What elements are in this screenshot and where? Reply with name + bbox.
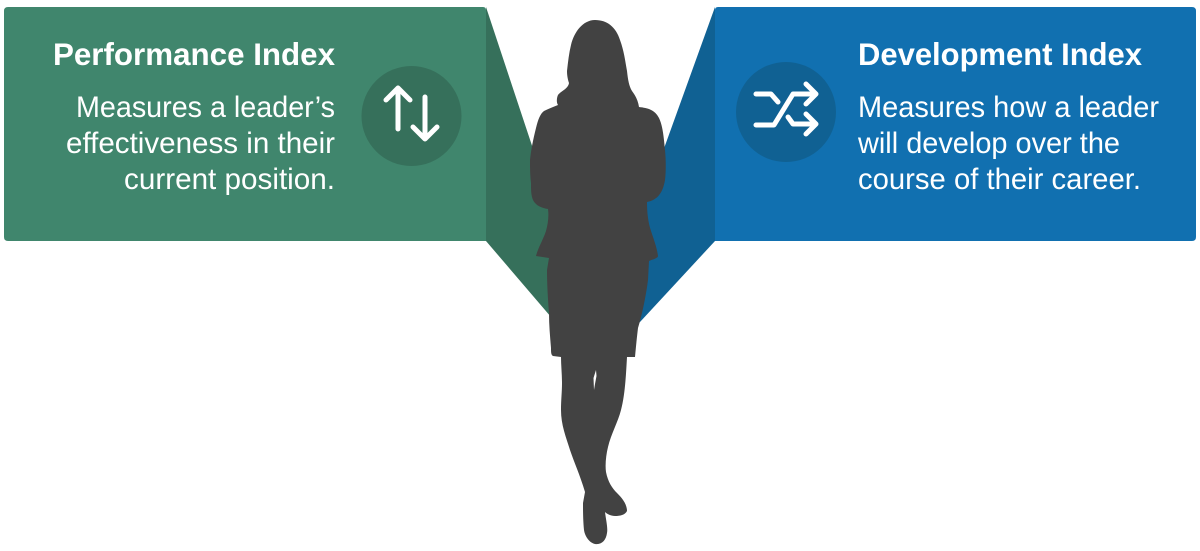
icon: up and down arrows — [362, 66, 462, 166]
panel: development index — [630, 7, 1196, 330]
blue fold — [630, 7, 715, 330]
description: development index: course of their career. — [858, 163, 1141, 196]
silhouette: woman standing — [530, 20, 666, 544]
description: development index: will develop over the — [857, 127, 1120, 160]
icon: shuffle arrows — [736, 62, 836, 162]
blue card — [715, 7, 1196, 241]
green card — [4, 7, 486, 241]
heading: performance index: Performance Index — [53, 36, 335, 72]
description: performance index: effectiveness in their — [66, 127, 335, 160]
green fold — [486, 7, 560, 325]
description: performance index: current position. — [124, 163, 335, 196]
description: development index: Measures how a leader — [858, 91, 1159, 124]
panel: performance index — [4, 7, 560, 325]
heading: development index: Development Index — [858, 36, 1142, 72]
description: performance index: Measures a leader’s — [76, 91, 335, 124]
description: development index — [857, 91, 1159, 196]
description: performance index — [66, 91, 335, 196]
